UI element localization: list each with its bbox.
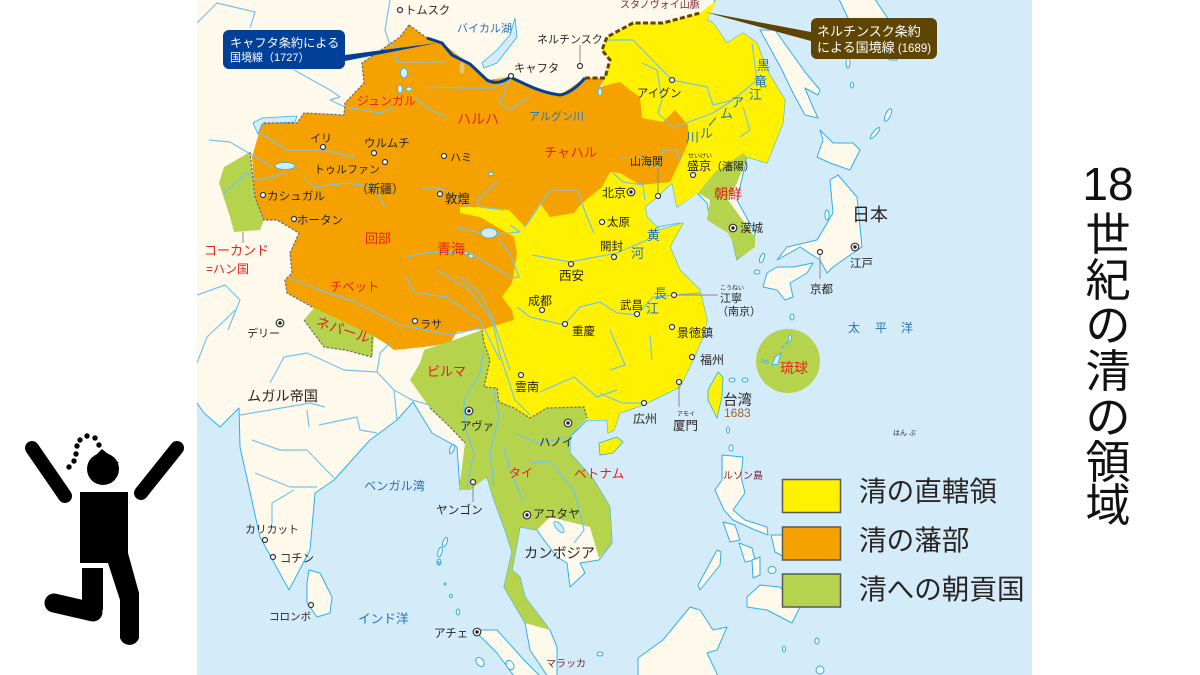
legend item: tributary bbox=[782, 574, 1025, 607]
callout: Nerchinsk treaty: ネルチンスク条約 bbox=[817, 24, 921, 39]
city labels: 盛京（瀋陽） bbox=[687, 158, 755, 173]
labels: rivers and seas: ベンガル湾 bbox=[364, 479, 425, 493]
labels: rivers and seas: 江 bbox=[749, 87, 762, 102]
legend item: direct rule: 清の直轄領 bbox=[859, 476, 997, 507]
city labels: イリ bbox=[310, 133, 332, 145]
labels: rivers and seas: アルグン川 bbox=[529, 109, 584, 123]
city labels: 重慶 bbox=[572, 324, 595, 338]
city labels: 京都 bbox=[810, 283, 833, 296]
region labels: red: チベット bbox=[330, 280, 379, 294]
region labels: red: タイ bbox=[509, 466, 533, 480]
labels: rivers and seas: 川 bbox=[686, 130, 699, 145]
labels: rivers and seas: ル bbox=[700, 126, 713, 141]
city labels: トムスク bbox=[405, 4, 450, 17]
region labels: red: ネパール bbox=[314, 314, 372, 346]
Ryukyu islands bbox=[762, 335, 792, 365]
callout: Nerchinsk treaty: による国境線 (1689) bbox=[817, 40, 931, 55]
city labels: 敦煌 bbox=[445, 191, 470, 206]
cities bbox=[243, 8, 822, 608]
callout: Nerchinsk treaty bbox=[705, 12, 937, 59]
city labels: 雲南 bbox=[515, 379, 539, 394]
city labels: 景徳鎮 bbox=[677, 325, 713, 340]
labels: place names on map: カンボジア bbox=[524, 546, 595, 562]
city labels: ヤンゴン bbox=[436, 503, 483, 517]
region: Qing vassal territories (orange) bbox=[252, 25, 688, 350]
callout: Kyakhta treaty: キャフタ条約による bbox=[230, 35, 339, 50]
title: 世 bbox=[1085, 209, 1131, 260]
city labels: 江戸 bbox=[850, 257, 873, 270]
title: 紀 bbox=[1085, 255, 1131, 306]
city labels: コロンボ bbox=[269, 611, 311, 623]
border: Nerchinsk treaty line bbox=[585, 13, 700, 78]
labels: rivers and seas: 太 bbox=[848, 320, 860, 335]
Sakhalin bbox=[760, 30, 820, 118]
rivers bbox=[197, 0, 757, 543]
city labels: （新疆） bbox=[356, 182, 404, 196]
Sri Lanka bbox=[307, 570, 332, 617]
labels: rivers and seas: 竜 bbox=[754, 74, 767, 89]
region: Qing direct rule (yellow) bbox=[460, 0, 785, 455]
labels: rivers and seas: ー bbox=[703, 112, 723, 132]
city labels: 厦門 bbox=[673, 419, 698, 433]
labels: rivers and seas: 河 bbox=[631, 246, 644, 261]
labels: rivers and seas: 平 bbox=[875, 321, 887, 335]
city labels: 開封 bbox=[600, 239, 623, 253]
islands bbox=[437, 378, 824, 674]
legend item: vassal: 清の藩部 bbox=[859, 525, 969, 556]
labels: place names on map: 日本 bbox=[852, 205, 888, 225]
labels: rivers and seas: 江 bbox=[646, 301, 659, 316]
city labels: 成都 bbox=[528, 294, 552, 308]
panel: map bbox=[190, 0, 1032, 675]
region labels: red: ビルマ bbox=[427, 364, 466, 379]
labels: place names on map: 1683 bbox=[724, 406, 751, 420]
region labels: red: ジュンガル bbox=[357, 94, 416, 108]
city labels bbox=[245, 4, 916, 640]
labels: rivers and seas: バイカル湖 bbox=[457, 22, 512, 35]
city labels: 太原 bbox=[607, 216, 630, 229]
city labels: 江寧 bbox=[720, 292, 742, 305]
labels: rivers and seas: 黄 bbox=[647, 228, 660, 243]
labels: rivers and seas bbox=[358, 22, 913, 626]
city labels: アチェ bbox=[434, 627, 468, 640]
city labels: （南京） bbox=[717, 305, 761, 318]
labels: rivers and seas: インド洋 bbox=[358, 612, 409, 626]
city labels: 福州 bbox=[700, 352, 724, 367]
labels: place names on map: スタノヴォイ山脈 bbox=[620, 0, 700, 11]
city labels: キャフタ bbox=[514, 62, 559, 75]
city labels: 山海関 bbox=[630, 154, 663, 168]
labels: place names on map bbox=[247, 0, 888, 670]
labels: rivers and seas: ア bbox=[731, 95, 744, 110]
city labels: ウルムチ bbox=[364, 137, 410, 150]
city labels: コチン bbox=[280, 552, 314, 565]
region labels: red: 朝鮮 bbox=[714, 186, 742, 202]
border: dotted Qing frontier bbox=[250, 25, 587, 443]
callout: Kyakhta treaty bbox=[223, 30, 437, 69]
title: 領 bbox=[1085, 437, 1131, 488]
labels: rivers and seas: 洋 bbox=[901, 320, 913, 335]
Borneo bbox=[638, 607, 727, 675]
labels: rivers and seas: ム bbox=[720, 106, 733, 121]
legend item: direct rule bbox=[782, 476, 997, 512]
city labels: こうねい bbox=[720, 285, 744, 292]
region labels: red: =ハン国 bbox=[206, 262, 249, 276]
northeast land bbox=[837, 0, 897, 60]
region labels: red: チャハル bbox=[544, 145, 597, 160]
city labels: ハミ bbox=[450, 152, 472, 164]
city labels: 武昌 bbox=[620, 299, 643, 312]
city labels: せいけい bbox=[688, 153, 712, 160]
region labels: red: 青海 bbox=[437, 241, 465, 257]
icon: celebrating person bbox=[32, 433, 177, 645]
title: の bbox=[1085, 300, 1131, 351]
lakes bbox=[253, 18, 602, 534]
capitals bbox=[276, 188, 859, 636]
border: Kyakhta treaty line bbox=[427, 38, 585, 95]
legend bbox=[782, 476, 1025, 607]
region: tributary states (green) bbox=[219, 152, 820, 630]
title: 18 bbox=[1082, 158, 1134, 210]
city labels: ホータン bbox=[297, 214, 343, 227]
labels: place names on map: マラッカ bbox=[546, 658, 586, 670]
labels: place names on map: 台湾 bbox=[723, 392, 752, 409]
city labels: ラサ bbox=[420, 318, 442, 331]
region labels: red: 回部 bbox=[365, 231, 391, 246]
city labels: アモイ bbox=[677, 411, 695, 418]
city labels: カリカット bbox=[245, 523, 299, 536]
Japan bbox=[738, 58, 893, 320]
city labels: カシュガル bbox=[267, 190, 325, 203]
Sumatra bbox=[474, 630, 544, 675]
city labels: アユタヤ bbox=[533, 508, 580, 521]
legend item: tributary: 清への朝貢国 bbox=[859, 574, 1025, 605]
title: 域 bbox=[1085, 480, 1131, 531]
region labels: red: 琉球 bbox=[780, 360, 808, 376]
legend item: vassal bbox=[782, 525, 969, 560]
city labels: ネルチンスク bbox=[537, 33, 603, 46]
city labels: 漢城 bbox=[740, 221, 763, 235]
region labels: red: ベトナム bbox=[574, 467, 624, 481]
city labels: ハノイ bbox=[539, 437, 574, 449]
city labels: 西安 bbox=[559, 269, 584, 283]
region labels: red: コーカンド bbox=[204, 243, 269, 258]
mainland landmass bbox=[190, 0, 785, 675]
title: 清 bbox=[1085, 346, 1131, 397]
title bbox=[1082, 158, 1134, 531]
region labels: red: ハルハ bbox=[457, 111, 499, 127]
city labels: はん ぶ bbox=[893, 429, 916, 437]
labels: rivers and seas: 長 bbox=[654, 286, 667, 301]
labels: rivers and seas: 黒 bbox=[757, 58, 770, 73]
city labels: 広州 bbox=[633, 412, 657, 426]
city labels: アヴァ bbox=[460, 419, 494, 433]
city labels: 北京 bbox=[602, 186, 626, 200]
city labels: アイグン bbox=[637, 86, 681, 100]
title: の bbox=[1085, 392, 1131, 443]
Philippines bbox=[698, 455, 800, 623]
city labels: デリー bbox=[247, 326, 280, 340]
callout: Kyakhta treaty: 国境線（1727） bbox=[230, 51, 309, 64]
city labels: トゥルファン bbox=[314, 164, 380, 176]
labels: place names on map: ルソン島 bbox=[723, 469, 763, 482]
labels: place names on map: ムガル帝国 bbox=[247, 389, 318, 405]
region labels: red bbox=[204, 94, 808, 481]
